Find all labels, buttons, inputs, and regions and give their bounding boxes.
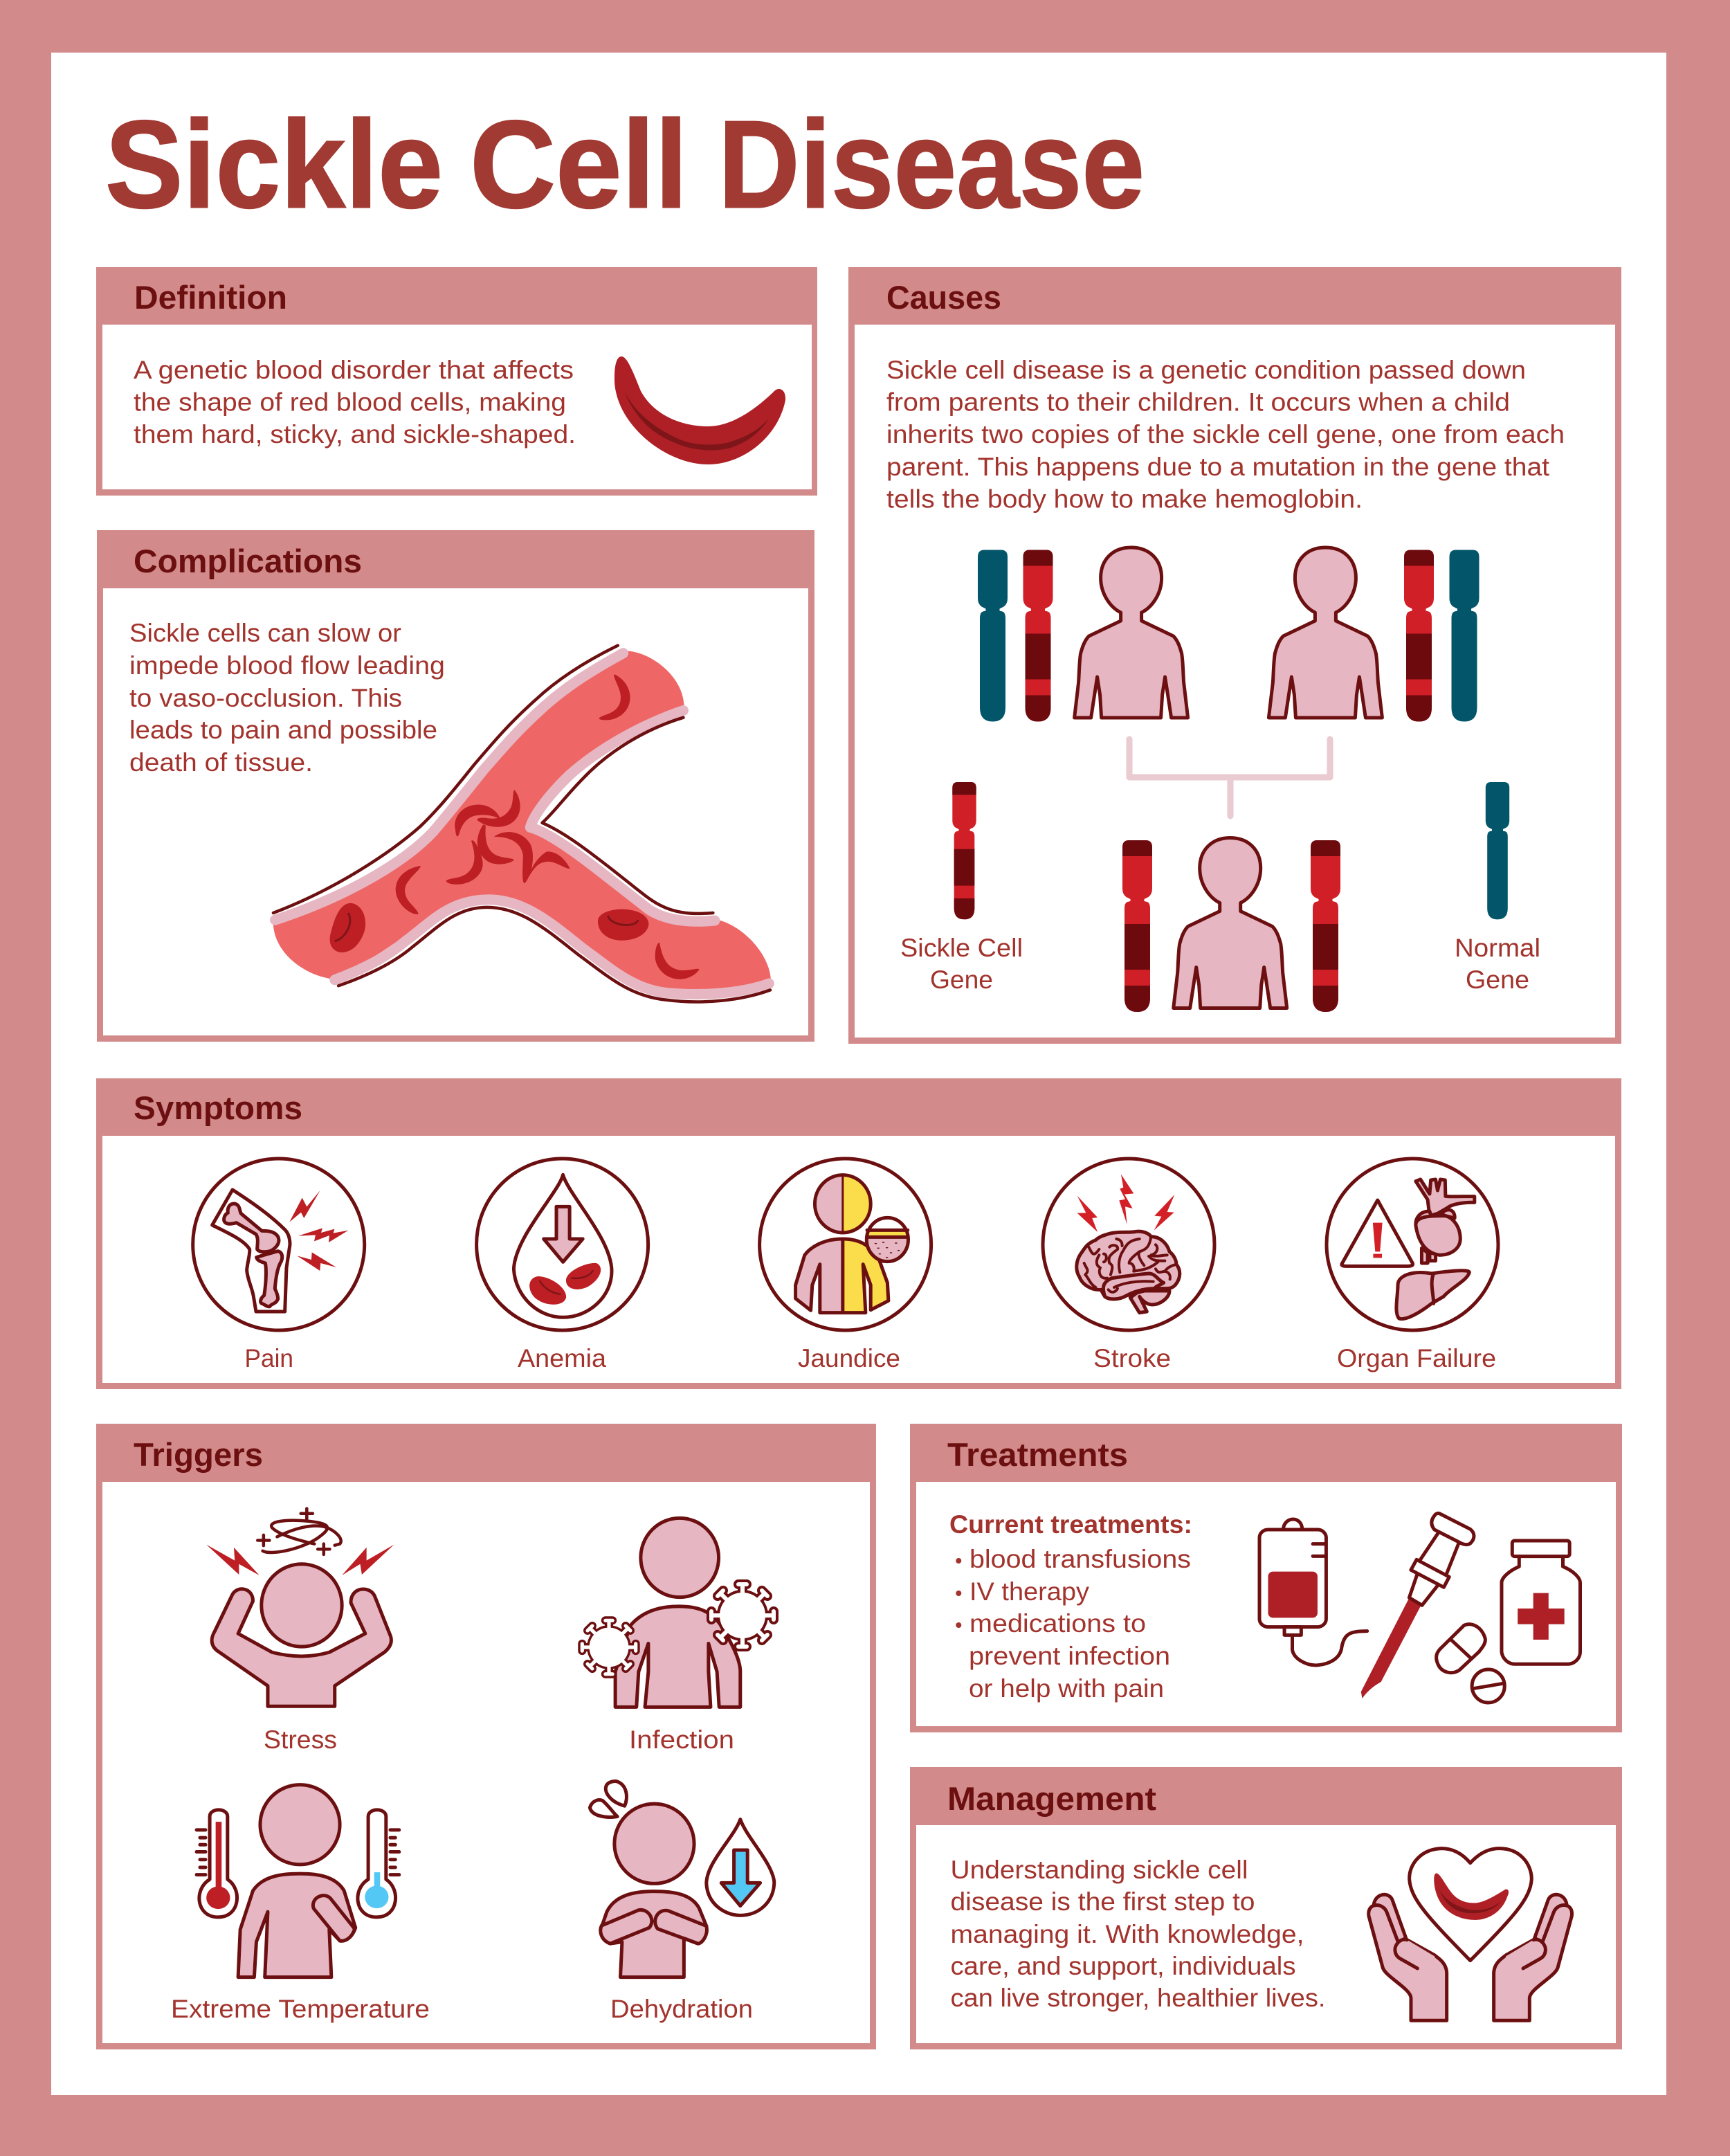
text block: causes: Sickle cell disease is a genetic condition passed down: [886, 355, 1526, 384]
heading: management: Management: [947, 1780, 1156, 1817]
symptom: anemia: [477, 1159, 648, 1373]
text block: causes: [886, 355, 1565, 514]
text block: causes: inherits two copies of the sickle cell gene, one from each: [886, 419, 1565, 449]
parent one with chromosomes: [978, 547, 1188, 721]
text block: complications: Sickle cells can slow or: [129, 618, 401, 647]
symptom: stroke: [1043, 1159, 1214, 1373]
text block: causes: from parents to their children. It occurs when a child: [886, 388, 1510, 417]
legend: normal gene: Gene: [1466, 965, 1529, 994]
trigger: stress: Stress: [264, 1725, 337, 1754]
panel: causes: [848, 267, 1621, 1044]
heading: treatments: Treatments: [947, 1436, 1128, 1473]
text block: management: disease is the first step to: [951, 1887, 1255, 1916]
panel: management: [910, 1767, 1622, 2049]
title: Disease: [718, 96, 1145, 234]
text block: definition: [134, 355, 576, 449]
text block: causes: parent. This happens due to a mutation in the gene that: [886, 452, 1550, 481]
text block: management: can live stronger, healthier lives.: [951, 1983, 1326, 2012]
icon: hands holding heart: [1369, 1849, 1572, 2020]
list of treatments: IV therapy: [969, 1577, 1089, 1606]
panel: definition: [96, 267, 817, 496]
list of treatments: or help with pain: [969, 1674, 1164, 1703]
text block: complications: to vaso-occlusion. This: [129, 683, 402, 712]
parent two with chromosomes: [1268, 547, 1479, 721]
trigger: infection: Infection: [629, 1725, 734, 1754]
symptom: organ failure: [1327, 1159, 1498, 1373]
icon: medicine bottle: [1502, 1541, 1581, 1664]
text block: complications: death of tissue.: [129, 748, 313, 777]
symptom: jaundice: [760, 1159, 931, 1373]
text block: causes: tells the body how to make hemoglobin.: [886, 484, 1363, 514]
title: [105, 96, 1145, 234]
legend: normal gene: [1455, 782, 1540, 994]
text block: definition: A genetic blood disorder that affects: [134, 355, 574, 384]
heading: complications: Complications: [134, 543, 362, 579]
text block: definition: them hard, sticky, and sickle-shaped.: [134, 419, 576, 449]
text block: complications: leads to pain and possible: [129, 715, 437, 744]
list of treatments: medications to: [969, 1609, 1146, 1638]
title: Sickle: [105, 96, 443, 234]
text block: management: care, and support, individuals: [951, 1951, 1295, 1980]
text block: complications: impede blood flow leading: [129, 651, 445, 680]
symptom: pain: Pain: [245, 1343, 293, 1373]
icon: blood bag: [1259, 1519, 1367, 1665]
trigger: infection: [582, 1518, 774, 1754]
legend: sickle cell gene: [900, 782, 1023, 994]
list of treatments: blood transfusions: [969, 1544, 1191, 1573]
legend: sickle cell gene: Sickle Cell: [900, 933, 1023, 962]
child with two sickle cell chromosomes: [1122, 837, 1341, 1012]
text block: management: managing it. With knowledge,: [951, 1919, 1304, 1948]
symptom: jaundice: Jaundice: [798, 1343, 900, 1373]
text block: management: Understanding sickle cell: [951, 1855, 1248, 1884]
heading: causes: Causes: [886, 279, 1001, 316]
heading: triggers: Triggers: [134, 1436, 263, 1473]
legend: normal gene: Normal: [1455, 933, 1540, 962]
symptom: pain: [193, 1159, 365, 1373]
panel: complications: [97, 530, 814, 1042]
trigger: dehydration: Dehydration: [610, 1994, 753, 2023]
trigger: extreme temperature: Extreme Temperature: [171, 1994, 430, 2023]
list of treatments: prevent infection: [969, 1641, 1170, 1670]
text block: management: [951, 1855, 1326, 2012]
subheading: current treatments: Current treatments:: [949, 1510, 1192, 1539]
icon: IV needle: [1361, 1513, 1474, 1698]
list of treatments: [956, 1544, 1191, 1703]
panel: treatments: [910, 1424, 1622, 1732]
trigger: dehydration: [590, 1781, 774, 2023]
trigger: stress: [206, 1509, 394, 1754]
text block: definition: the shape of red blood cells, making: [134, 388, 566, 417]
legend: sickle cell gene: Gene: [930, 965, 993, 994]
title: Cell: [470, 96, 688, 234]
trigger: extreme temperature: [171, 1785, 430, 2023]
icon: treatment supplies: [1259, 1513, 1581, 1703]
symptom: stroke: Stroke: [1093, 1343, 1171, 1373]
icon: pills: [1437, 1624, 1504, 1703]
heading: symptoms: Symptoms: [134, 1089, 302, 1126]
symptom: anemia: Anemia: [518, 1343, 606, 1373]
heading: definition: Definition: [134, 279, 287, 316]
inheritance connector: [1129, 739, 1330, 816]
text block: complications: [129, 618, 445, 777]
illustration: blood vessel with sickle cells: [273, 646, 771, 1002]
icon: sickle cell: [614, 356, 785, 464]
panel: symptoms: [96, 1078, 1621, 1389]
panel: triggers: [96, 1424, 876, 2049]
symptom: organ failure: Organ Failure: [1337, 1343, 1496, 1373]
